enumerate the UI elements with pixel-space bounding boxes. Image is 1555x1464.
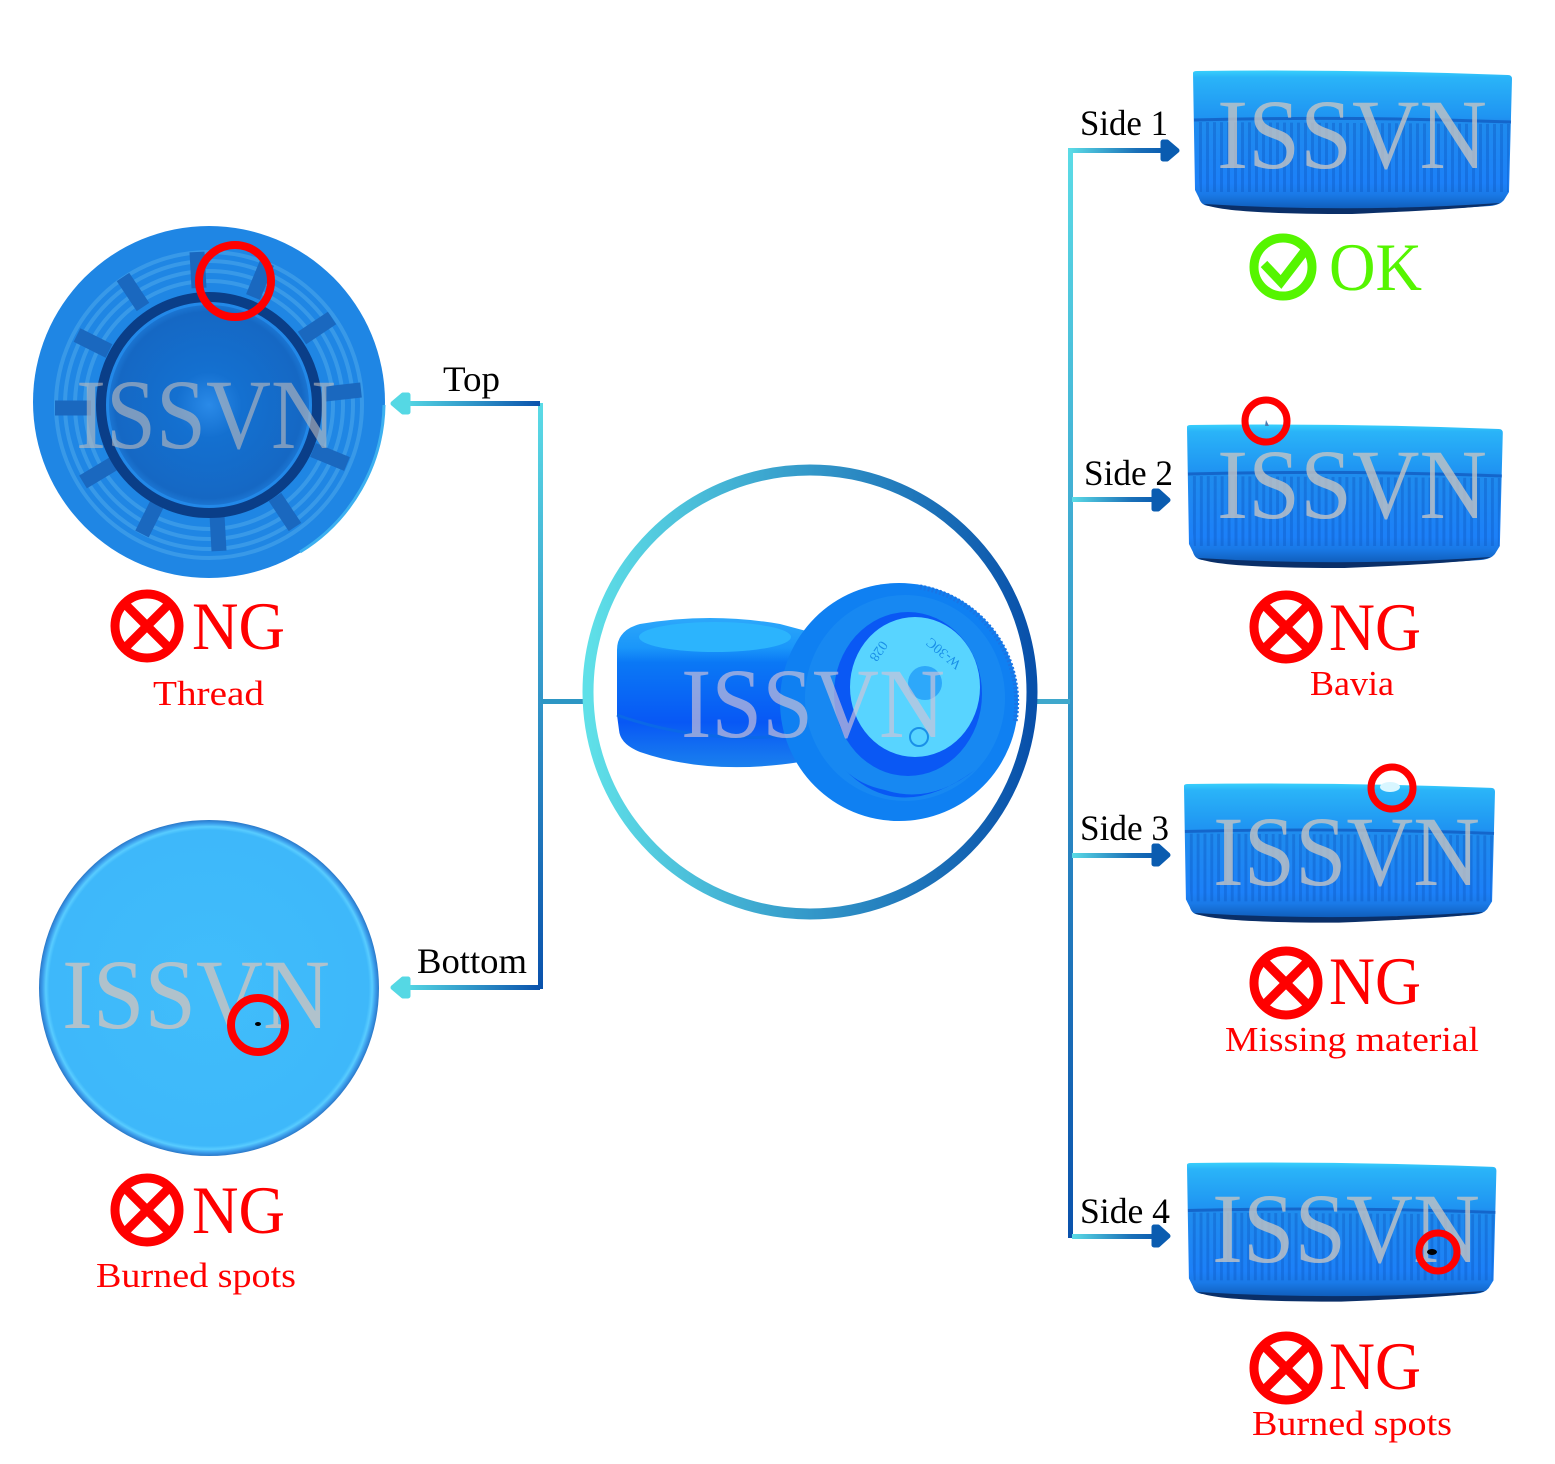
- dome: [109, 305, 309, 505]
- arrow: side 2: [1072, 491, 1168, 509]
- arrow: side 1: [1070, 142, 1177, 159]
- status: top NG Thread: Thread: [153, 674, 265, 713]
- connector: left branch lines: [538, 403, 583, 989]
- status: side 4 NG Burned spots: Burned spots: [1252, 1404, 1452, 1443]
- status: side 4 NG Burned spots: [1252, 1328, 1452, 1443]
- panel: central cap photo: [588, 470, 1032, 914]
- status: OK: OK: [1329, 229, 1422, 305]
- label: Side 1: Side 1: [1080, 103, 1168, 143]
- left cap: [617, 618, 810, 767]
- connector: right branch lines: [1036, 148, 1073, 1238]
- right cap: [780, 583, 1018, 821]
- arrow: side 3: [1072, 846, 1168, 864]
- panel: side 4 cap: ISSVN: [1212, 1173, 1480, 1284]
- label: Side 4: Side 4: [1080, 1191, 1170, 1231]
- burned spot: [255, 1022, 261, 1026]
- ribs: [55, 252, 361, 551]
- label: Bottom: Bottom: [417, 941, 527, 981]
- label: Top: Top: [443, 359, 500, 399]
- thread rings: [56, 252, 362, 558]
- panel: bottom view cap: [39, 820, 379, 1156]
- red defect ring: [1245, 400, 1287, 442]
- red defect ring: [1419, 1233, 1457, 1271]
- missing material notch: [1380, 782, 1400, 792]
- panel: side 1 cap: ISSVN: [1217, 79, 1487, 190]
- watermark: ISSVN: [681, 648, 945, 759]
- panel: side 3 cap: [1184, 767, 1495, 923]
- red defect ring: [1371, 767, 1413, 809]
- panel: top view cap: [33, 226, 385, 578]
- right cap: 028: [866, 638, 890, 664]
- watermark: ISSVN: [62, 939, 330, 1050]
- status: top NG Thread: NG: [192, 588, 285, 664]
- watermark: ISSVN: [76, 359, 336, 470]
- red defect ring: [231, 998, 285, 1052]
- cap body: [33, 226, 385, 578]
- arrow: side 4: [1072, 1227, 1168, 1245]
- arrow: to top view: [393, 395, 540, 412]
- status: bottom NG Burned spots: [96, 1172, 296, 1295]
- status: side 2 NG Bavia: NG: [1329, 589, 1421, 665]
- status: side 2 NG Bavia: [1254, 589, 1421, 703]
- status: top NG Thread: [115, 588, 285, 713]
- dark groove: [101, 297, 317, 513]
- status: side 3 NG Missing material: NG: [1329, 943, 1421, 1019]
- red defect ring: [199, 245, 271, 317]
- panel: side 2 cap: [1187, 400, 1503, 568]
- right cap: W-30C: [924, 634, 965, 671]
- label: Side 3: Side 3: [1080, 808, 1169, 848]
- status: bottom NG Burned spots: NG: [192, 1172, 285, 1248]
- status: side 4 NG Burned spots: NG: [1329, 1328, 1421, 1404]
- panel: side 3 cap: ISSVN: [1213, 796, 1480, 907]
- burned spot: [1427, 1249, 1437, 1255]
- arrow: to bottom view: [393, 979, 540, 996]
- status: bottom NG Burned spots: Burned spots: [96, 1256, 296, 1295]
- status: side 3 NG Missing material: [1225, 943, 1479, 1059]
- status: OK: [1254, 229, 1422, 305]
- bavia burr: [1265, 420, 1269, 426]
- label: Side 2: Side 2: [1084, 453, 1173, 493]
- panel: side 2 cap: ISSVN: [1217, 429, 1487, 540]
- status: side 3 NG Missing material: Missing material: [1225, 1020, 1479, 1059]
- status: side 2 NG Bavia: Bavia: [1310, 664, 1394, 703]
- gradient ring: [588, 470, 1032, 914]
